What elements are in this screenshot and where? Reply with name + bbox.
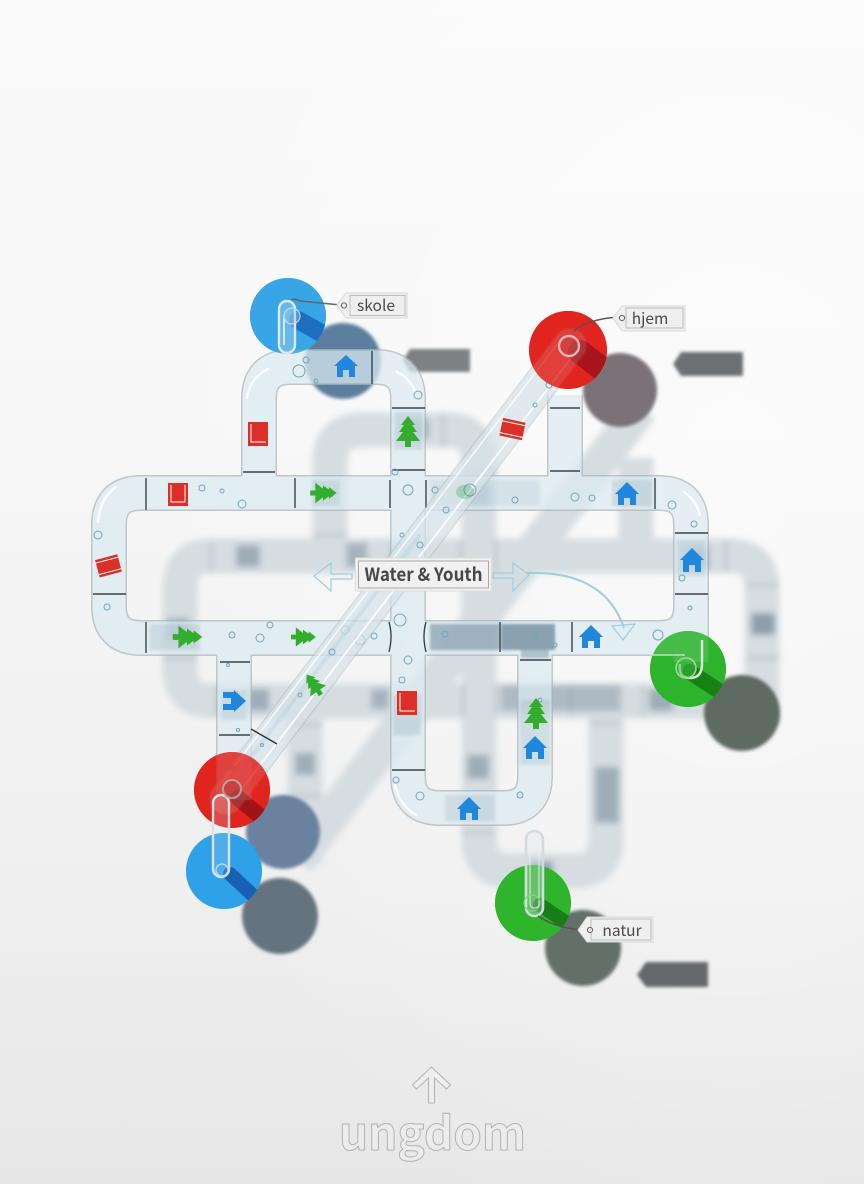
book xyxy=(397,691,417,715)
pipe joints xyxy=(93,351,708,770)
tag: natur: natur xyxy=(602,919,643,941)
dark water patches xyxy=(150,412,705,821)
pipe network xyxy=(93,351,708,821)
icons: trees xyxy=(173,416,548,729)
icons: books xyxy=(95,418,526,715)
glass clips xyxy=(213,301,702,916)
book xyxy=(248,422,268,446)
clip: skole xyxy=(279,301,300,353)
water droplets xyxy=(94,357,697,800)
house rotated xyxy=(223,690,246,712)
clip: red to blue link xyxy=(213,780,241,877)
disc: blue top xyxy=(250,278,330,354)
tree xyxy=(173,626,202,648)
disc: green right xyxy=(650,631,726,707)
pipe highlights xyxy=(98,369,700,815)
clip: natur xyxy=(524,831,543,916)
tree xyxy=(291,627,316,647)
arrow right with curve xyxy=(493,563,635,640)
clip: hjem xyxy=(559,336,579,356)
cast shadow of pipe network xyxy=(164,408,779,883)
colored discs xyxy=(186,278,726,941)
disc: red top xyxy=(529,311,610,389)
glass over discs, tinted xyxy=(186,278,726,941)
disc: red bottom xyxy=(194,752,270,828)
house xyxy=(523,736,547,759)
centre flow arrows xyxy=(314,563,635,640)
tree xyxy=(396,416,420,447)
house xyxy=(579,625,603,648)
tag: natur xyxy=(538,916,653,942)
arrow up xyxy=(412,1067,450,1103)
ungdom wordmark: ungdom xyxy=(339,1098,526,1164)
book xyxy=(499,418,526,440)
house xyxy=(680,548,704,572)
tag: hjem xyxy=(574,306,685,331)
icons: houses xyxy=(223,355,704,820)
tree xyxy=(299,669,329,700)
arrow left xyxy=(314,563,352,591)
book xyxy=(168,483,188,506)
disc: blue bottom xyxy=(186,833,262,909)
tag: hjem: hjem xyxy=(632,307,668,329)
tree xyxy=(310,483,337,503)
title label: Water & Youth xyxy=(364,561,482,587)
house xyxy=(334,355,358,377)
disc: green bottom xyxy=(495,865,571,941)
tag: skole: skole xyxy=(357,294,395,316)
house xyxy=(457,797,481,820)
book xyxy=(95,554,122,578)
house xyxy=(615,482,639,505)
diagonal glass tube xyxy=(216,343,578,798)
tree xyxy=(524,698,548,729)
tag: skole xyxy=(291,293,407,318)
shadows of discs and tags xyxy=(242,323,780,987)
clip: green right xyxy=(650,640,702,678)
